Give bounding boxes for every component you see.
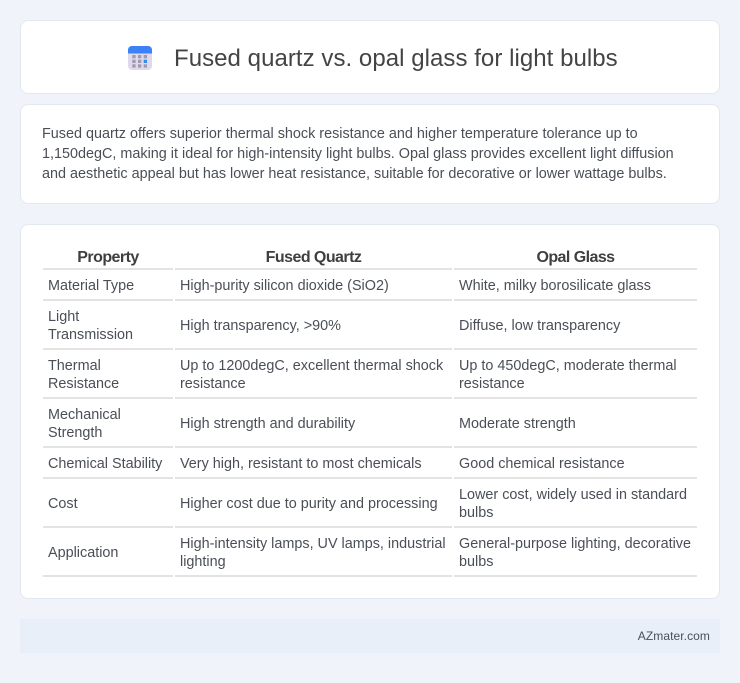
- row: cost: Lower cost, widely used in standard: [459, 487, 687, 503]
- row: chemical stability: [48, 456, 625, 472]
- intro paragraph: [42, 126, 674, 182]
- row: thermal resistance: Resistance: [48, 376, 119, 392]
- row: mechanical strength: [48, 407, 576, 441]
- row: application: General-purpose lighting, decorative: [459, 536, 691, 552]
- row: application: [48, 536, 691, 570]
- row: material type: [48, 278, 651, 294]
- row: thermal resistance: Up to 450degC, moderate thermal: [459, 358, 677, 374]
- row: application: High-intensity lamps, UV lamps, industrial: [180, 536, 446, 552]
- row: chemical stability: Good chemical resistance: [459, 456, 625, 472]
- footer bar: [20, 619, 720, 653]
- panel: intro text: [20, 104, 720, 204]
- comparison table: [43, 249, 697, 577]
- panel: title card: [20, 20, 720, 94]
- row: thermal resistance: Up to 1200degC, excellent thermal shock: [180, 358, 443, 374]
- row: thermal resistance: Thermal: [48, 358, 101, 374]
- title: Fused quartz vs. opal glass for light bulbs: [174, 45, 618, 72]
- row: cost: Higher cost due to purity and processing: [180, 496, 438, 512]
- row: mechanical strength: Moderate strength: [459, 416, 576, 432]
- row: cost: bulbs: [459, 505, 493, 521]
- header: Opal Glass: Opal Glass: [536, 249, 615, 266]
- intro paragraph: and aesthetic appeal but has lower heat resistance, suitable for decorative or lower wattage bulbs.: [42, 166, 667, 182]
- row: light transmission: [48, 309, 620, 343]
- row: light transmission: Transmission: [48, 327, 133, 343]
- row: mechanical strength: High strength and durability: [180, 416, 355, 432]
- header: Fused Quartz: Fused Quartz: [266, 249, 361, 266]
- panel: comparison table: [20, 224, 720, 599]
- icon: calendar: [128, 46, 152, 70]
- row: material type: Material Type: [48, 278, 134, 294]
- row: chemical stability: Chemical Stability: [48, 456, 162, 472]
- intro paragraph: 1,150degC, making it ideal for high-intensity light bulbs. Opal glass provides excellent light diffusion: [42, 146, 674, 162]
- row: thermal resistance: resistance: [180, 376, 246, 392]
- footer credit: AZmater.com: [638, 629, 710, 643]
- row: cost: [48, 487, 687, 521]
- row: mechanical strength: Mechanical: [48, 407, 121, 423]
- row: chemical stability: Very high, resistant to most chemicals: [180, 456, 422, 472]
- row: application: Application: [48, 545, 118, 561]
- row: thermal resistance: resistance: [459, 376, 525, 392]
- row: light transmission: Diffuse, low transparency: [459, 318, 620, 334]
- row: mechanical strength: Strength: [48, 425, 102, 441]
- row: application: bulbs: [459, 554, 493, 570]
- row: material type: White, milky borosilicate glass: [459, 278, 651, 294]
- intro paragraph: Fused quartz offers superior thermal shock resistance and higher temperature tolerance up to: [42, 126, 638, 142]
- row: cost: Cost: [48, 496, 78, 512]
- row: material type: High-purity silicon dioxide (SiO2): [180, 278, 389, 294]
- row: light transmission: High transparency, >90%: [180, 318, 341, 334]
- row: thermal resistance: [48, 358, 677, 392]
- row: application: lighting: [180, 554, 226, 570]
- header: Property: Property: [77, 249, 139, 266]
- row: light transmission: Light: [48, 309, 79, 325]
